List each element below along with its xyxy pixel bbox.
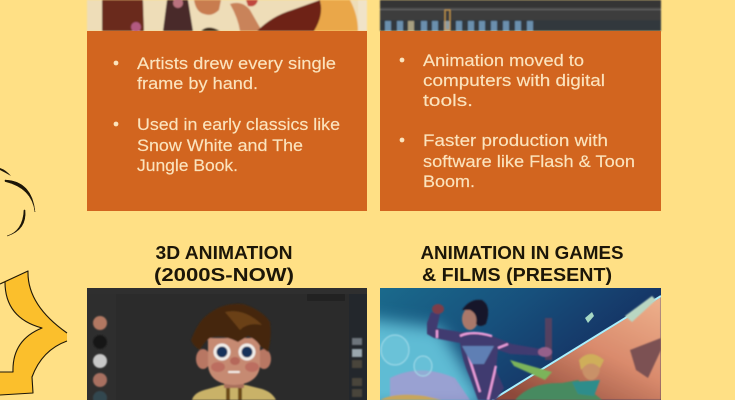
heading: 3D animation	[154, 243, 294, 285]
text: artists drew every frame: frame by hand.	[137, 74, 258, 93]
text: faster production: Boom.	[423, 172, 475, 191]
text: artists drew every frame: Artists drew every single	[137, 54, 336, 73]
text: moved to computers: Animation moved to	[423, 51, 584, 70]
layer thumbnails	[352, 338, 362, 397]
heading: 3D animation: (2000S-NOW)	[154, 265, 294, 285]
text: faster production: Faster production with	[423, 131, 608, 150]
bullet: artists drew	[114, 61, 118, 65]
text: early classics: Snow White and The	[137, 136, 303, 155]
image: digital animation timeline	[380, 0, 661, 31]
panel: digital animation facts	[380, 31, 661, 211]
text: faster production: software like Flash & Toon	[423, 152, 635, 171]
heading: animation in games and films	[420, 243, 624, 285]
text: early classics: Used in early classics like	[137, 115, 340, 134]
decoration: cloud outline arcs	[0, 168, 35, 236]
heading: animation in games and films: ANIMATION IN GAMES	[420, 243, 624, 263]
image: hand-drawn animation still	[87, 0, 367, 32]
text: early classics	[137, 115, 340, 175]
text: faster production	[423, 131, 635, 191]
heading: 3D animation: 3D ANIMATION	[156, 243, 292, 263]
text: moved to computers: computers with digital	[423, 71, 605, 90]
bullet: early classics	[114, 122, 118, 126]
heading: animation in games and films: & FILMS (PRESENT)	[422, 265, 612, 285]
decoration: yellow starburst	[0, 271, 67, 395]
text: moved to computers	[423, 51, 605, 110]
bullet: moved to computers	[400, 58, 404, 62]
image: games and films key art	[360, 288, 661, 400]
material spheres	[93, 316, 107, 400]
text: artists drew every frame	[137, 54, 336, 93]
boy in green	[510, 354, 604, 400]
3D boy character	[191, 304, 276, 400]
flying creature	[630, 338, 661, 378]
woman in neon suit	[427, 300, 552, 400]
text: early classics: Jungle Book.	[137, 156, 238, 175]
text: moved to computers: tools.	[423, 91, 473, 110]
image: 3D character software	[87, 288, 367, 400]
bullet: faster production	[400, 138, 404, 142]
panel: hand-drawn animation facts	[87, 31, 367, 211]
